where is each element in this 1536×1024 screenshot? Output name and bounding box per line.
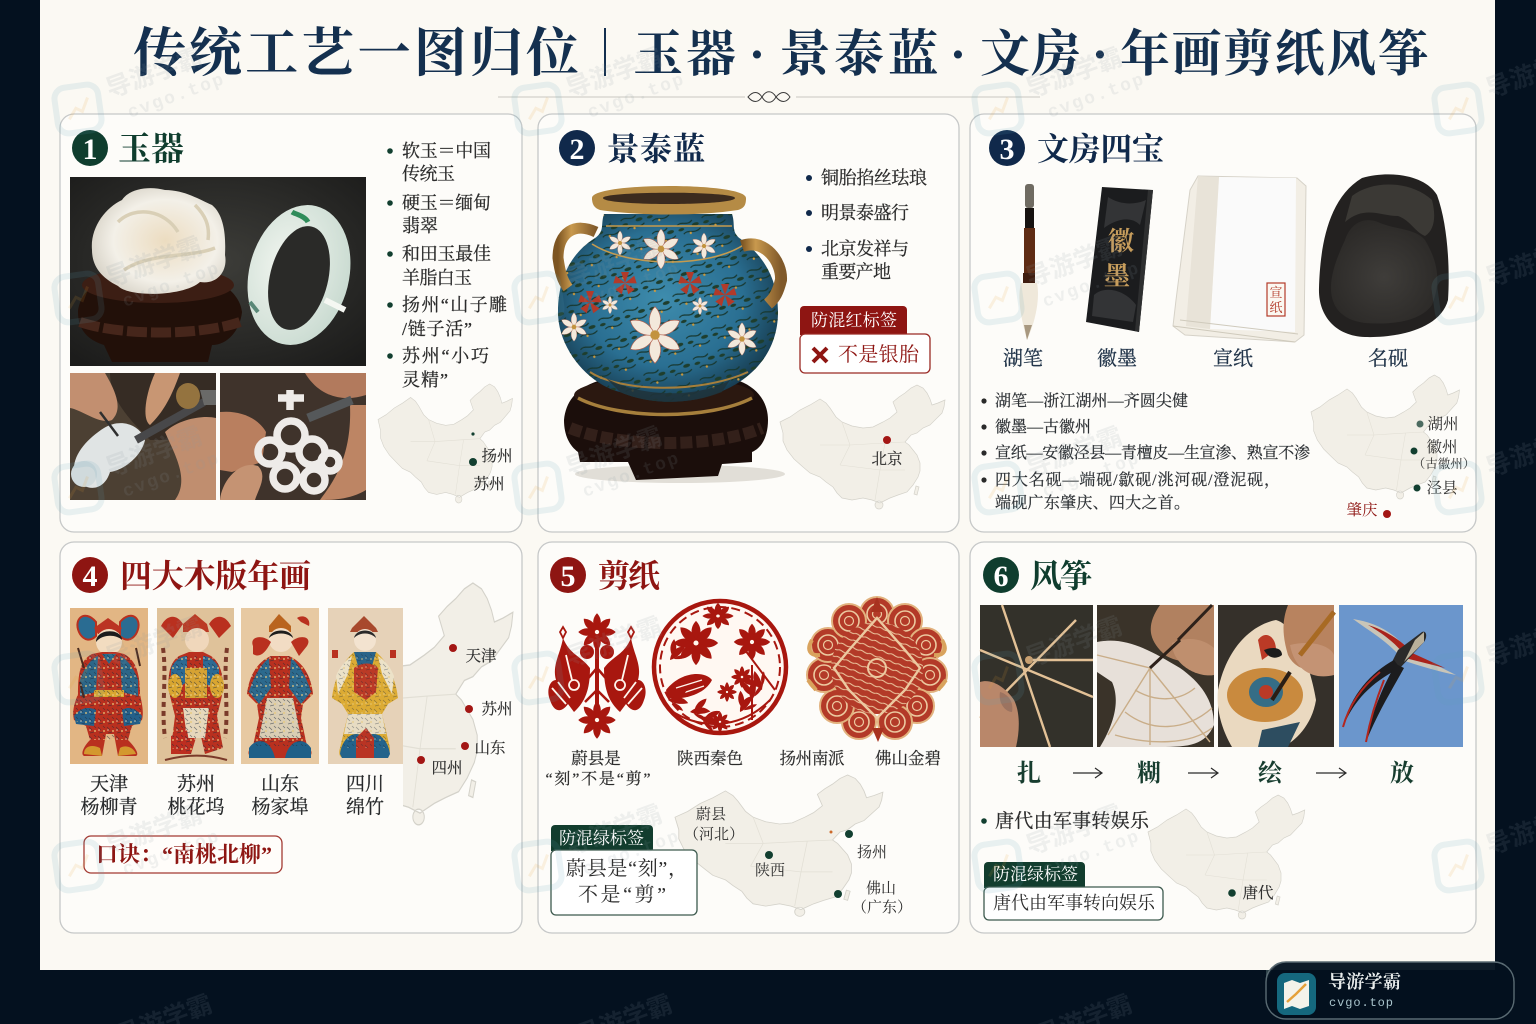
map: 文房四宝产地: 泾县	[1426, 479, 1458, 497]
watermarks: 导游学霸	[102, 422, 206, 483]
watermarks: cvgo.top	[1045, 70, 1148, 124]
bullet list: 玉器: 扬州“山子雕	[402, 294, 507, 315]
callout: 防混绿标签	[551, 825, 697, 915]
labels: prints: 杨柳青	[80, 796, 138, 818]
brand badge: 导游学霸	[1328, 972, 1401, 992]
bullet list: 文房四宝	[981, 392, 1310, 512]
panel heading: 风筝: 6	[994, 560, 1008, 593]
process labels: 扎	[1017, 760, 1041, 787]
brand badge	[1266, 962, 1514, 1019]
map: 文房四宝产地: 肇庆	[1346, 501, 1378, 519]
map: 唐代: 唐代	[1242, 884, 1274, 902]
print: 绵竹	[328, 608, 403, 764]
map: 玉器产地	[378, 384, 513, 503]
papercut: 蔚县	[548, 613, 646, 739]
bullet list: 文房四宝: 宣纸—安徽泾县—青檀皮—生宣渗、熟宣不渗	[995, 444, 1310, 462]
photo: 宣纸 paper: 纸	[1269, 300, 1283, 315]
map: 年画产地	[403, 582, 514, 826]
stand	[564, 378, 768, 480]
map: 文房四宝产地: （古徽州）	[1413, 456, 1475, 471]
panel heading: 景泰蓝	[559, 130, 705, 167]
title: ·	[749, 26, 765, 82]
watermarks: cvgo.top	[120, 259, 223, 313]
watermarks: 导游学霸	[1022, 612, 1126, 673]
labels: papercuts: 佛山金碧	[875, 749, 941, 768]
photo: 名砚 inkstone	[1319, 174, 1449, 337]
map: 北京: 北京	[871, 450, 903, 468]
title: ·	[1092, 26, 1108, 82]
watermarks: cvgo.top	[580, 827, 683, 881]
callout: 防混绿标签: 不是“剪”	[578, 883, 666, 906]
title: ·	[950, 26, 966, 82]
photo: 徽墨 ink stick	[1086, 187, 1153, 332]
panel heading: 景泰蓝: 景泰蓝	[607, 131, 705, 167]
icon: cross	[813, 348, 827, 362]
callout: 防混绿标签: 防混绿标签	[993, 865, 1078, 884]
map: 剪纸产地: 扬州	[857, 844, 887, 861]
bullet list: 文房四宝: 端砚广东肇庆、四大之首。	[995, 494, 1190, 512]
callout: 防混红标签: 不是银胎	[838, 343, 920, 366]
bullet: 风筝: 唐代由军事转娱乐	[995, 810, 1150, 832]
bullet list: 文房四宝: 湖笔—浙江湖州—齐圆尖健	[995, 392, 1188, 410]
bullet list: 玉器: 软玉＝中国	[402, 141, 491, 161]
callout: 防混绿标签: 蔚县是“刻”，	[566, 857, 688, 880]
callout: 防混红标签: 防混红标签	[811, 311, 897, 330]
rim	[592, 189, 746, 209]
panel heading: 四大木版年画: 四大木版年画	[120, 558, 311, 594]
map: 唐代	[1148, 795, 1305, 919]
callout: 口诀: 口诀：“南桃北柳”	[96, 842, 272, 867]
callout: 防混绿标签: 唐代由军事转向娱乐	[993, 893, 1156, 913]
watermarks: cvgo.top	[1040, 259, 1143, 313]
bullet list: 玉器	[387, 141, 507, 390]
panel heading: 文房四宝: 3	[1000, 133, 1014, 166]
title: 景泰蓝	[780, 26, 938, 82]
panel heading: 风筝: 风筝	[1030, 558, 1092, 594]
photo: 绘	[1218, 605, 1334, 747]
photo: carving jade with tool	[70, 373, 216, 500]
watermarks: cvgo.top	[580, 449, 683, 503]
labels: four treasures: 宣纸	[1213, 347, 1253, 370]
title: 玉器	[633, 26, 736, 82]
labels: four treasures	[1003, 347, 1408, 370]
print: 杨家埠	[241, 608, 319, 764]
watermarks: 导游学霸	[102, 612, 206, 673]
print: 杨柳青	[70, 608, 148, 764]
watermarks: 导游学霸	[562, 232, 666, 293]
panel heading: 剪纸	[550, 557, 660, 594]
print: 桃花坞	[157, 608, 234, 764]
bullet list: 玉器: 苏州“小巧	[402, 346, 489, 366]
process labels: 放	[1390, 760, 1414, 787]
callout: 防混红标签	[800, 306, 930, 373]
bullet list: 玉器: 硬玉＝缅甸	[402, 193, 491, 213]
labels: prints: 绵竹	[346, 796, 384, 818]
map: 剪纸产地: （广东）	[852, 899, 912, 916]
map: 玉器产地: 扬州	[481, 447, 513, 465]
bullet list: 玉器: 灵精”	[402, 370, 448, 390]
bullet list: 玉器: 和田玉最佳	[402, 244, 491, 264]
body	[558, 214, 778, 402]
bullet list: 景泰蓝: 北京发祥与	[821, 239, 909, 259]
title	[133, 25, 1428, 83]
labels: four treasures: 徽墨	[1097, 347, 1137, 370]
labels: prints: 苏州	[177, 773, 215, 795]
map: 剪纸产地: 陕西	[755, 861, 785, 879]
watermarks: 导游学霸	[562, 612, 666, 673]
title: 传统工艺一图归位	[133, 25, 579, 83]
panel: 剪纸	[538, 542, 959, 933]
labels: papercuts: 陕西秦色	[677, 749, 743, 768]
panel heading: 四大木版年画: 4	[82, 560, 98, 593]
map: 年画产地: 天津	[465, 647, 497, 665]
photo: 湖笔 brush	[1019, 184, 1038, 340]
bullet list: 玉器: 羊脂白玉	[402, 268, 472, 288]
watermarks: 导游学霸	[1022, 422, 1126, 483]
process labels: 糊	[1137, 760, 1161, 787]
photo: 放	[1339, 605, 1463, 747]
map: 北京	[780, 385, 945, 509]
title ornament	[498, 92, 1040, 102]
watermarks: 导游学霸	[1022, 232, 1126, 293]
map: 剪纸产地: 佛山	[866, 880, 896, 897]
map: 剪纸产地: （河北）	[684, 826, 744, 843]
bullet list: 景泰蓝: 铜胎掐丝珐琅	[821, 168, 927, 188]
map: 文房四宝产地: 湖州	[1427, 415, 1459, 433]
map: 年画产地: 苏州	[481, 699, 513, 718]
watermarks: 导游学霸	[1022, 800, 1126, 861]
map: 文房四宝产地: 徽州	[1426, 438, 1458, 456]
watermarks: 导游学霸	[562, 43, 666, 104]
callout: 口诀	[84, 836, 282, 873]
map: 剪纸产地: 蔚县	[696, 805, 726, 823]
panel heading: 玉器: 1	[82, 133, 98, 166]
watermarks: cvgo.top	[585, 70, 688, 124]
arrows	[1073, 768, 1346, 778]
panel: 景泰蓝	[538, 114, 959, 532]
panel heading: 玉器: 玉器	[118, 131, 184, 168]
icon: map logo	[1277, 973, 1316, 1015]
process labels	[1017, 760, 1414, 787]
photo: 徽墨 ink stick: 徽	[1108, 227, 1134, 256]
watermarks: 导游学霸	[1022, 43, 1126, 104]
title: 年画剪纸风筝	[1120, 26, 1428, 82]
labels: papercuts: “刻”不是“剪”	[546, 770, 650, 788]
bullet list: 玉器: 翡翠	[402, 216, 438, 236]
callout: 防混绿标签	[984, 862, 1163, 920]
labels: prints: 天津	[90, 773, 128, 795]
map: 文房四宝产地	[1311, 375, 1475, 519]
labels: prints	[80, 773, 384, 818]
panel heading: 风筝	[983, 557, 1092, 594]
brand badge: cvgo.top	[1329, 996, 1393, 1010]
map: 年画产地: 四州	[431, 759, 463, 777]
panel: 风筝	[970, 542, 1476, 933]
watermarks: cvgo.top	[120, 827, 223, 881]
panel: 四大木版年画	[60, 542, 522, 933]
labels: prints: 山东	[261, 773, 299, 795]
labels: prints: 杨家埠	[251, 796, 309, 818]
bullet list: 文房四宝: 徽墨—古徽州	[995, 418, 1091, 436]
labels: papercuts: 蔚县是	[571, 749, 621, 768]
photo: 徽墨 ink stick: 墨	[1104, 262, 1131, 291]
watermarks: 导游学霸	[102, 43, 206, 104]
photo: 宣纸 paper	[1173, 176, 1306, 342]
watermarks: cvgo.top	[125, 70, 228, 124]
labels: four treasures: 名砚	[1368, 347, 1408, 370]
labels: prints: 桃花坞	[167, 796, 225, 818]
handles	[558, 228, 596, 288]
labels: prints: 四川	[346, 774, 384, 795]
watermarks: 导游学霸	[102, 232, 206, 293]
photo: cloisonne vase	[550, 186, 785, 483]
panel: 文房四宝	[970, 114, 1476, 532]
map: 玉器产地: 苏州	[473, 474, 505, 493]
panel heading: 文房四宝: 文房四宝	[1037, 131, 1164, 167]
watermarks: cvgo.top	[120, 449, 223, 503]
bullet list: 景泰蓝	[806, 168, 927, 282]
photo: 糊	[1097, 605, 1214, 747]
bullet list: 景泰蓝: 明景泰盛行	[821, 203, 909, 223]
watermarks: 导游学霸	[102, 800, 206, 861]
bullet list: 景泰蓝: 重要产地	[821, 262, 891, 282]
watermarks: cvgo.top	[580, 259, 683, 313]
flowers	[628, 307, 682, 363]
labels: papercuts: 扬州南派	[780, 749, 845, 768]
bullet list: 文房四宝: 四大名砚—端砚/歙砚/洮河砚/澄泥砚，	[995, 471, 1280, 489]
labels: four treasures: 湖笔	[1003, 347, 1043, 370]
photo: 扎	[980, 605, 1093, 747]
watermarks: cvgo.top	[1040, 827, 1143, 881]
title: 文房	[980, 26, 1081, 82]
panel: 玉器	[60, 114, 522, 532]
photo: openwork jade pendant	[220, 373, 366, 500]
process labels: 绘	[1258, 760, 1284, 787]
bullet list: 玉器: /链子活”	[402, 319, 472, 339]
watermarks: 导游学霸	[562, 422, 666, 483]
map: 剪纸产地	[675, 775, 912, 916]
labels: papercuts	[546, 749, 941, 788]
bullet list: 玉器: 传统玉	[402, 164, 455, 184]
photo: jade carving and bangle	[70, 177, 366, 366]
map: 年画产地: 山东	[474, 739, 506, 757]
panel heading: 剪纸: 5	[560, 560, 576, 593]
watermarks: cvgo.top	[1040, 449, 1143, 503]
watermarks: 导游学霸	[562, 800, 666, 861]
panel heading: 剪纸: 剪纸	[598, 558, 660, 594]
callout: 防混绿标签: 防混绿标签	[559, 829, 644, 848]
papercut: 陕西	[654, 601, 786, 733]
papercut: 佛山	[807, 597, 947, 742]
panel heading: 玉器	[72, 130, 184, 168]
panel heading: 景泰蓝: 2	[570, 133, 584, 166]
photo: 宣纸 paper: 宣	[1269, 285, 1283, 300]
